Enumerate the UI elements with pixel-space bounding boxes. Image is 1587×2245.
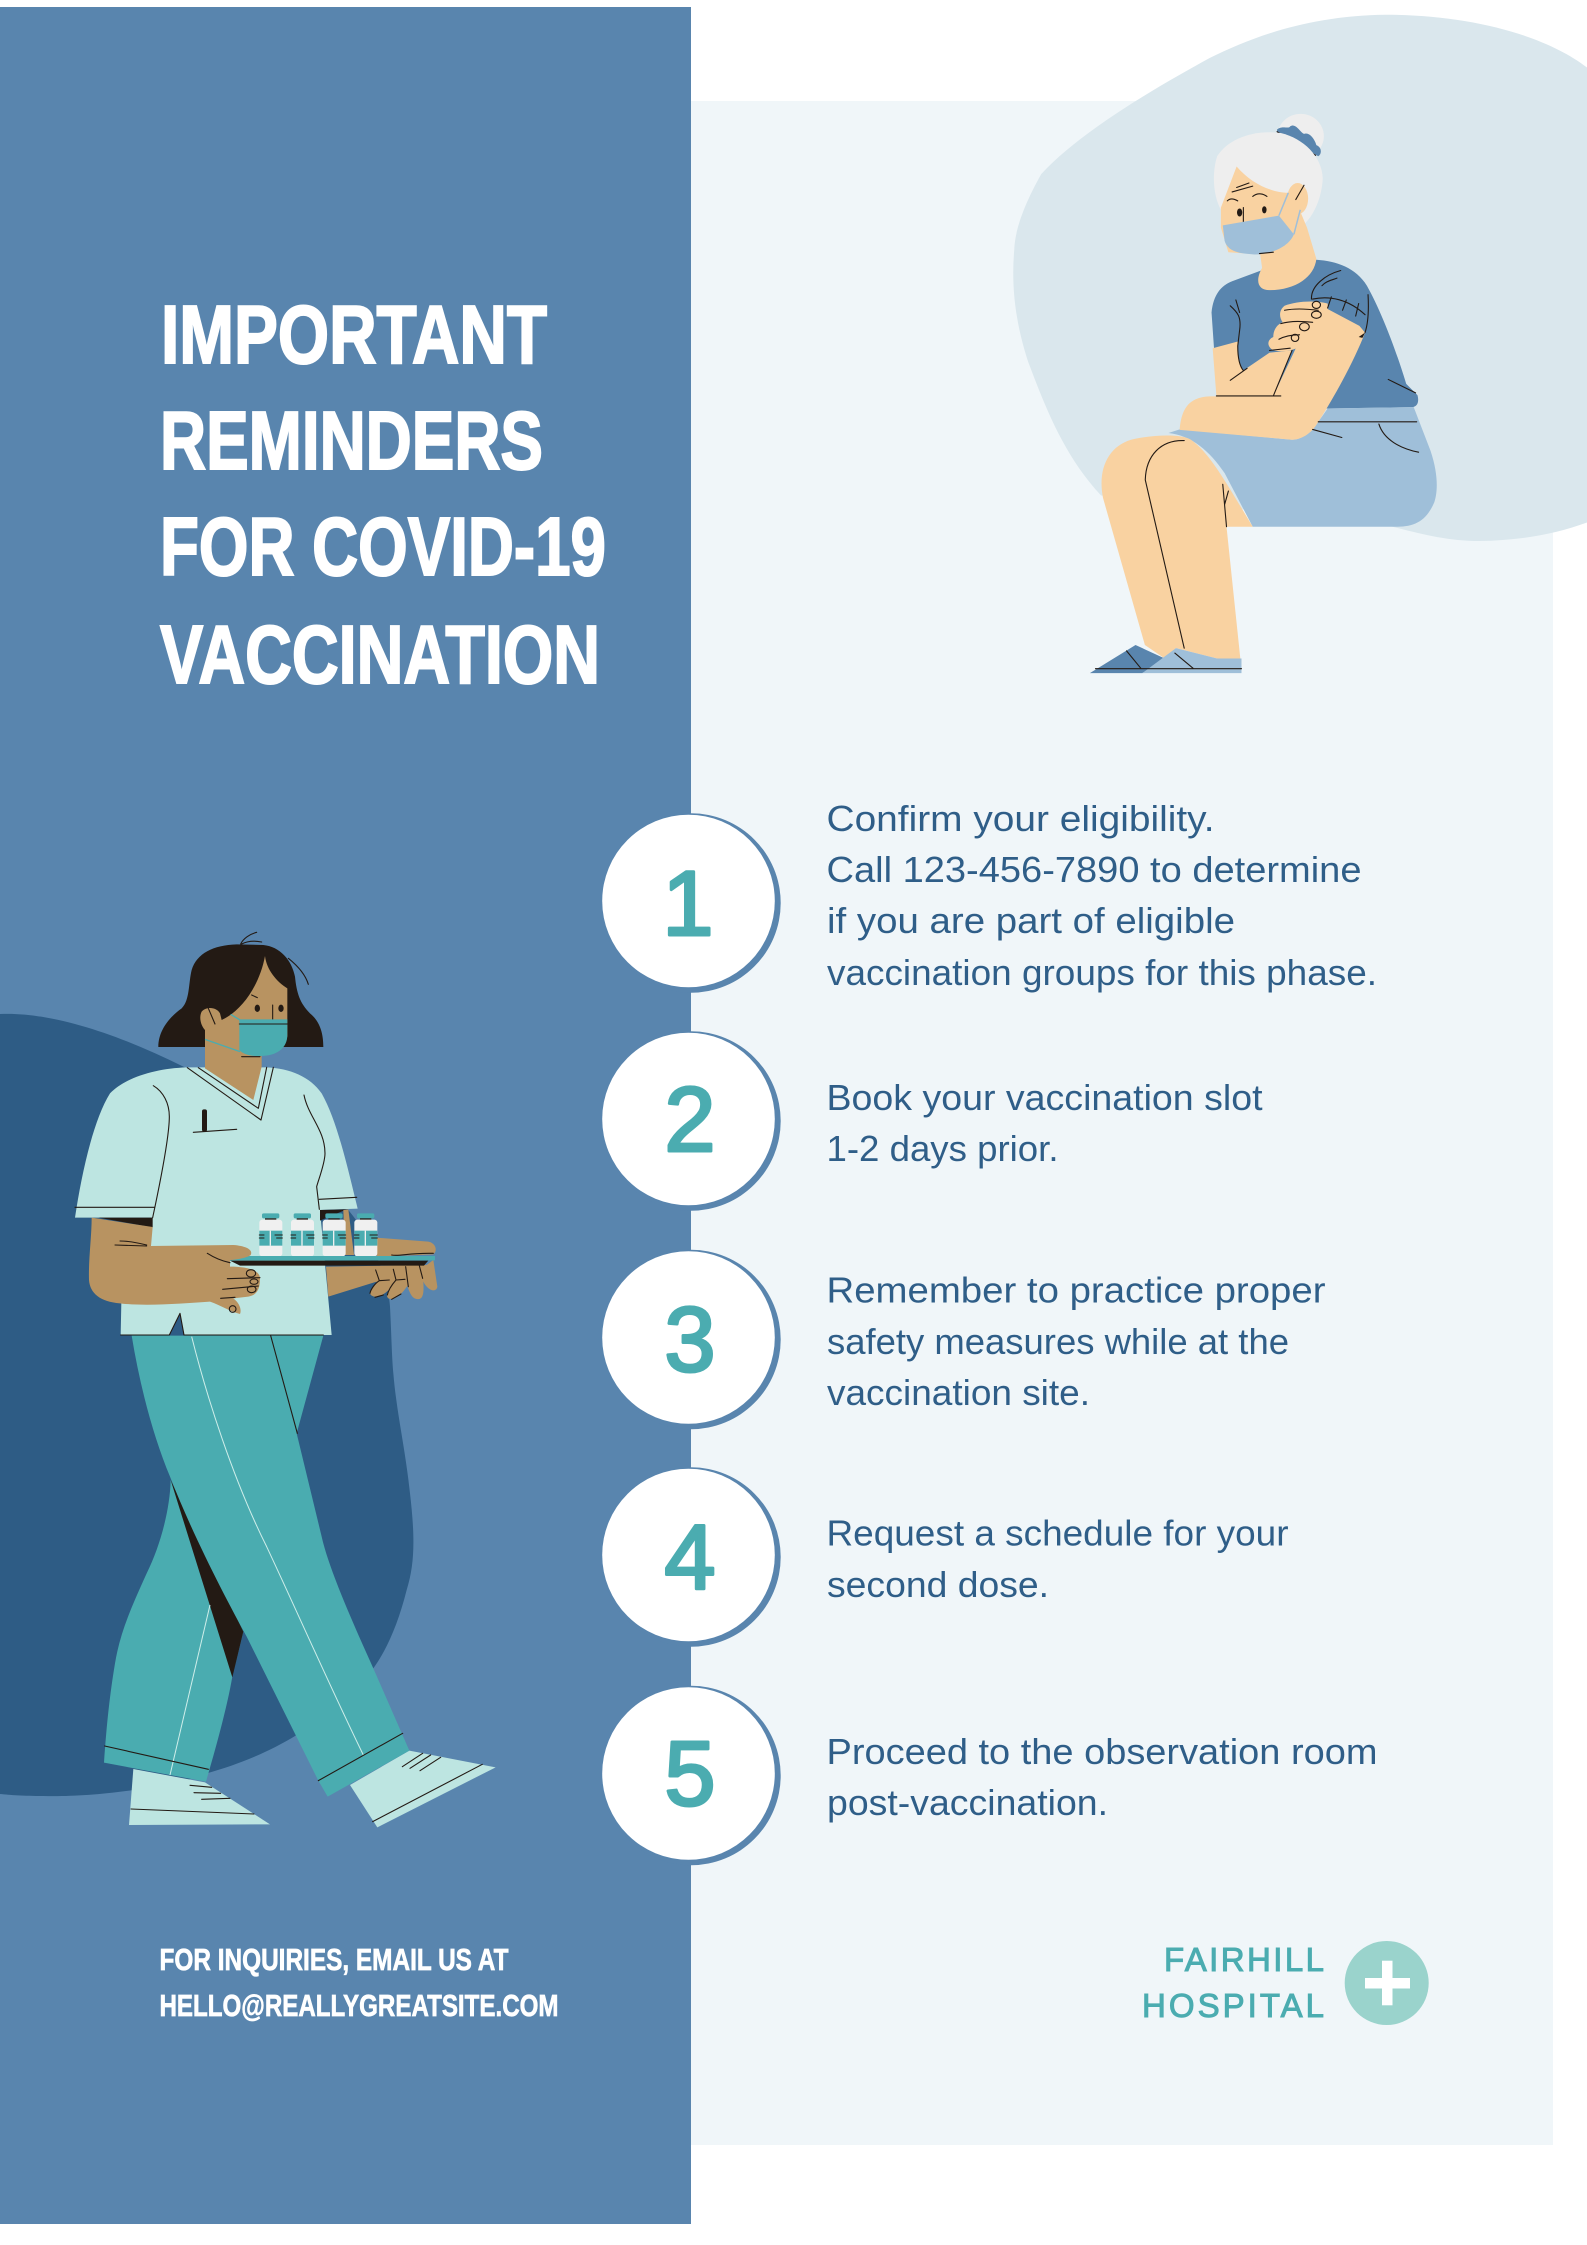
title: REMINDERS <box>160 394 543 487</box>
step 2 badge: 2 <box>664 1069 716 1171</box>
far hand lines <box>370 1253 433 1299</box>
dark blob behind nurse <box>0 1014 413 1796</box>
shirt <box>1212 260 1418 411</box>
step 5 text <box>826 1731 1378 1823</box>
back trouser leg <box>104 1480 243 1782</box>
step 5 text: Proceed to the observation room <box>826 1731 1378 1772</box>
back shoe <box>129 1769 270 1825</box>
hospital name: HOSPITAL <box>1142 1987 1324 2024</box>
step 2 text <box>826 1077 1262 1169</box>
gripping hand <box>1268 302 1329 351</box>
step 1 text <box>826 798 1377 993</box>
icon: hospital cross <box>1345 1941 1429 2025</box>
step 5 badge <box>601 1686 781 1865</box>
face details <box>208 995 284 1024</box>
step 5 text: post-vaccination. <box>827 1782 1108 1823</box>
scrunchie <box>1277 125 1321 156</box>
inquiries contact text: FOR INQUIRIES, EMAIL US AT <box>160 1942 509 1977</box>
step 4 text: Request a schedule for your <box>826 1512 1289 1554</box>
hospital name <box>1142 1941 1324 2024</box>
tray <box>227 1256 435 1266</box>
near arm and hand <box>89 1218 260 1314</box>
face and neck <box>200 956 287 1100</box>
inquiries contact text <box>160 1942 558 2023</box>
ear <box>1287 183 1308 214</box>
title: VACCINATION <box>160 608 600 701</box>
grey hair <box>1214 132 1323 223</box>
illustration: nurse with vaccine tray <box>0 932 496 1827</box>
far sleeve shadow and upper arm <box>320 1209 354 1255</box>
step 1 text: Call 123-456-7890 to determine <box>826 849 1362 890</box>
upper arm and forearm <box>1180 308 1365 440</box>
shoes <box>1090 645 1241 673</box>
front shoe <box>350 1751 496 1827</box>
illustration: seated patient with bandaged arm <box>1090 114 1437 673</box>
leg lines <box>1145 441 1228 648</box>
face mask <box>205 1014 287 1057</box>
legs <box>1102 435 1253 670</box>
step 2 badge <box>601 1031 781 1211</box>
step 1 badge: 1 <box>662 853 714 955</box>
step 3 text: Remember to practice proper <box>826 1270 1326 1310</box>
step 4 badge <box>601 1467 781 1647</box>
skirt <box>1168 407 1437 527</box>
step 3 badge <box>601 1250 781 1429</box>
step 4 text <box>826 1512 1289 1605</box>
step 1 text: if you are part of eligible <box>827 900 1235 941</box>
panel: pale blob behind patient <box>1013 15 1587 541</box>
step 1 text: Confirm your eligibility. <box>826 798 1214 839</box>
step 4 badge: 4 <box>664 1507 716 1609</box>
body and hand lines <box>1216 271 1419 452</box>
step 3 text <box>826 1270 1326 1413</box>
step 3 text: vaccination site. <box>827 1372 1090 1413</box>
step 1 text: vaccination groups for this phase. <box>827 952 1377 993</box>
face details <box>1227 183 1267 224</box>
inquiries contact text: HELLO@REALLYGREATSITE.COM <box>160 1988 558 2023</box>
panel: blue left column <box>0 7 691 2224</box>
step 3 badge: 3 <box>664 1289 716 1391</box>
scrub top lines and collar <box>75 1067 357 1335</box>
face mask <box>1223 193 1300 254</box>
step 3 text: safety measures while at the <box>827 1321 1289 1362</box>
step 1 badge <box>601 813 781 993</box>
scrub top <box>75 1067 358 1335</box>
hair bun <box>1277 114 1324 158</box>
title: IMPORTANT <box>161 288 547 381</box>
title: FOR COVID-19 <box>160 500 606 593</box>
hospital name: FAIRHILL <box>1164 1941 1324 1978</box>
step 2 text: Book your vaccination slot <box>826 1077 1262 1118</box>
step 2 text: 1-2 days prior. <box>826 1128 1058 1169</box>
front trouser leg <box>132 1336 409 1797</box>
title <box>160 288 606 701</box>
hair <box>158 944 323 1047</box>
far arm behind tray <box>326 1238 437 1299</box>
step 4 text: second dose. <box>827 1564 1049 1605</box>
vaccine bottles <box>259 1213 377 1256</box>
panel: light background <box>691 101 1553 2145</box>
lower arm <box>1213 341 1292 396</box>
face and neck <box>1221 167 1316 290</box>
stray hairs <box>241 932 308 984</box>
step 5 badge: 5 <box>664 1723 716 1825</box>
